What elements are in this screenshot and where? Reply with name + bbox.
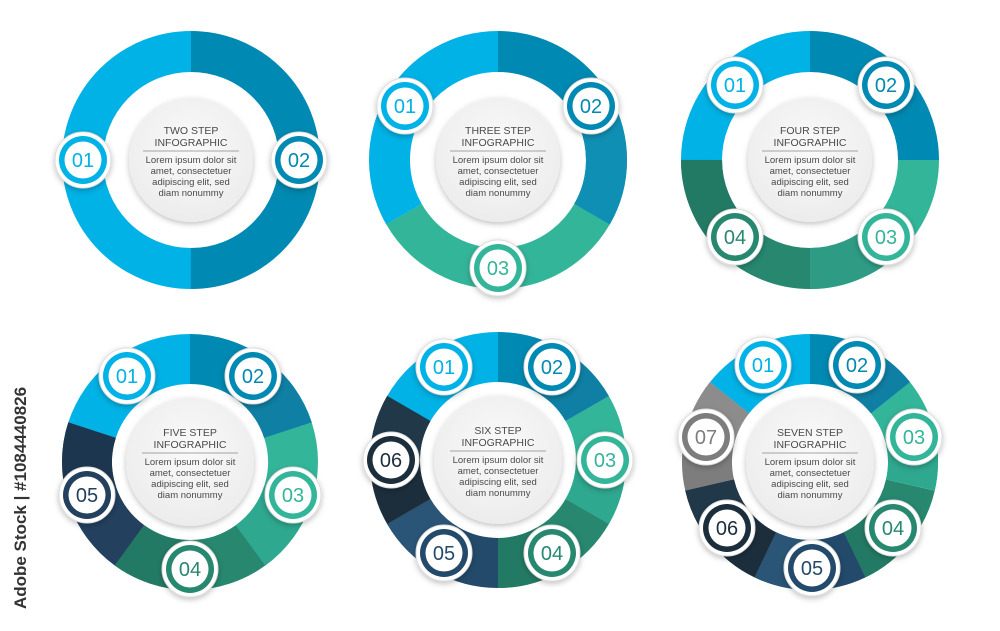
badge 06 — [363, 432, 419, 488]
ring: four step — [657, 7, 963, 313]
center circle: seven step: Lorem ipsum dolor sit — [765, 457, 856, 468]
badge 04 — [162, 541, 218, 597]
badge 03 — [577, 432, 633, 488]
center circle: seven step — [746, 398, 874, 526]
badge 05: 05 — [801, 558, 823, 580]
center circle: four step: adipiscing elit, sed — [771, 177, 849, 188]
badge 05: 05 — [433, 543, 455, 565]
badge 01 — [416, 339, 472, 395]
badge 03: 03 — [487, 258, 509, 280]
ring: six step — [357, 319, 639, 601]
center circle: three step — [436, 98, 560, 222]
badge 01 — [735, 337, 791, 393]
badge 05 — [416, 525, 472, 581]
center circle: six step: INFOGRAPHIC — [462, 437, 535, 449]
badge 03: 03 — [875, 227, 897, 249]
center circle: two step: adipiscing elit, sed — [152, 177, 230, 188]
center circle: four step: diam nonummy — [778, 188, 843, 199]
badge 02 — [271, 132, 327, 188]
badge 02: 02 — [875, 75, 897, 97]
badge 02 — [858, 57, 914, 113]
badge 01: 01 — [752, 355, 774, 377]
panel: three step — [350, 12, 646, 308]
badge 05 — [784, 540, 840, 596]
ring: two step — [82, 52, 300, 268]
center circle: six step: SIX STEP — [474, 425, 522, 437]
badge 01: 01 — [724, 75, 746, 97]
badge 02 — [563, 78, 619, 134]
center circle: four step — [748, 98, 872, 222]
badge 04: 04 — [724, 227, 746, 249]
center circle: five step: Lorem ipsum dolor sit — [145, 457, 236, 468]
center circle: six step: amet, consectetuer — [458, 466, 538, 477]
center circle: two step — [129, 98, 253, 222]
badge 05: 05 — [76, 485, 98, 507]
badge 02: 02 — [846, 355, 868, 377]
panel: seven step — [665, 317, 955, 607]
badge 04: 04 — [179, 559, 201, 581]
panel: two step — [55, 52, 327, 268]
panel: six step — [357, 319, 639, 601]
badge 02: 02 — [580, 96, 602, 118]
center circle: seven step: diam nonummy — [778, 490, 843, 501]
badge 02 — [225, 348, 281, 404]
badge 01: 01 — [116, 366, 138, 388]
ring: three step — [350, 12, 646, 308]
center circle: two step: TWO STEP — [164, 125, 218, 137]
center circle: two step: INFOGRAPHIC — [155, 137, 228, 149]
badge 01 — [377, 78, 433, 134]
badge 03: 03 — [594, 450, 616, 472]
badge 01: 01 — [394, 96, 416, 118]
center circle: two step: diam nonummy — [159, 188, 224, 199]
center circle: three step: diam nonummy — [466, 188, 531, 199]
badge 02: 02 — [242, 366, 264, 388]
center circle: two step: amet, consectetuer — [151, 166, 231, 177]
center circle: six step: Lorem ipsum dolor sit — [453, 455, 544, 466]
center circle: seven step: SEVEN STEP — [777, 427, 843, 439]
center circle: four step: FOUR STEP — [780, 125, 840, 137]
panel: five step — [46, 318, 334, 606]
center circle: five step — [126, 398, 254, 526]
center circle: five step: diam nonummy — [158, 490, 223, 501]
badge 01: 01 — [433, 357, 455, 379]
badge 06 — [699, 500, 755, 556]
badge 03: 03 — [282, 485, 304, 507]
center circle: five step: adipiscing elit, sed — [151, 479, 229, 490]
center circle: five step: amet, consectetuer — [150, 468, 230, 479]
badge 02: 02 — [541, 357, 563, 379]
badge 06: 06 — [716, 518, 738, 540]
watermark: adobe stock id: Adobe Stock | #1084440826 — [11, 387, 30, 609]
center circle: four step: Lorem ipsum dolor sit — [765, 155, 856, 166]
badge 07 — [678, 409, 734, 465]
center circle: three step: Lorem ipsum dolor sit — [453, 155, 544, 166]
badge 03 — [470, 240, 526, 296]
center circle: five step: FIVE STEP — [163, 427, 217, 439]
center circle: six step: diam nonummy — [466, 488, 531, 499]
badge 03: 03 — [903, 427, 925, 449]
center circle: six step — [434, 396, 562, 524]
panel: four step — [657, 7, 963, 313]
center circle: three step: INFOGRAPHIC — [462, 137, 535, 149]
badge 05 — [59, 467, 115, 523]
badge 03 — [886, 409, 942, 465]
badge 03 — [858, 209, 914, 265]
badge 03 — [265, 467, 321, 523]
center circle: four step: amet, consectetuer — [770, 166, 850, 177]
badge 07: 07 — [695, 427, 717, 449]
center circle: seven step: amet, consectetuer — [770, 468, 850, 479]
center circle: six step: adipiscing elit, sed — [459, 477, 537, 488]
badge 04 — [524, 525, 580, 581]
center circle: seven step: INFOGRAPHIC — [774, 439, 847, 451]
badge 02 — [524, 339, 580, 395]
badge 02 — [829, 337, 885, 393]
center circle: two step: Lorem ipsum dolor sit — [146, 155, 237, 166]
center circle: three step: adipiscing elit, sed — [459, 177, 537, 188]
center circle: three step: amet, consectetuer — [458, 166, 538, 177]
badge 04 — [707, 209, 763, 265]
ring: five step — [46, 318, 334, 606]
badge 01 — [707, 57, 763, 113]
badge 01 — [55, 132, 111, 188]
center circle: four step: INFOGRAPHIC — [774, 137, 847, 149]
center circle: three step: THREE STEP — [465, 125, 531, 137]
badge 01: 01 — [72, 150, 94, 172]
badge 04 — [865, 500, 921, 556]
center circle: seven step: adipiscing elit, sed — [771, 479, 849, 490]
badge 01 — [99, 348, 155, 404]
badge 04: 04 — [541, 543, 563, 565]
ring: seven step — [665, 317, 955, 607]
center circle: five step: INFOGRAPHIC — [154, 439, 227, 451]
badge 04: 04 — [882, 518, 904, 540]
badge 06: 06 — [380, 450, 402, 472]
badge 02: 02 — [288, 150, 310, 172]
